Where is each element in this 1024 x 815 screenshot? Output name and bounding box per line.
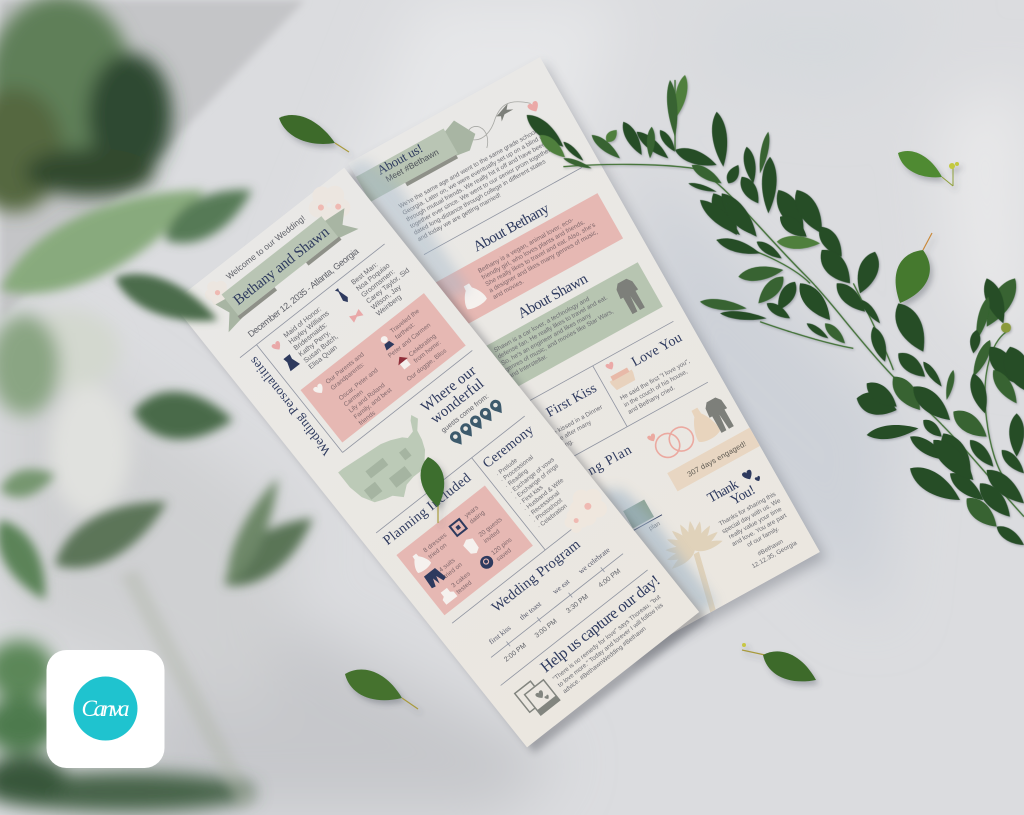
block: Wedding Plan: Wedding Plan	[550, 443, 634, 498]
block: First Kiss	[545, 386, 602, 446]
decoration: flowers behind banner	[195, 176, 357, 315]
block: Wedding Plan: plan	[648, 520, 662, 532]
block: groom's party: Groomsmen:	[360, 269, 396, 299]
block: Help us capture our day: Help us capture our day!	[538, 572, 664, 676]
block: Ceremony: · Husband & Wife	[522, 477, 566, 513]
block: bride's party: Maid of Honor:	[283, 306, 323, 340]
panel: planning stats	[396, 486, 533, 615]
block: Love You: Love You	[629, 330, 685, 370]
block: Love You: He said the first "I love you",	[619, 358, 692, 402]
block: Love You: in the couch of his house,	[623, 368, 689, 409]
banner: About us	[356, 120, 476, 202]
panel: About Bethany: friendly girl, who loves plants and friends.	[481, 219, 587, 281]
block: First Kiss: First Kiss	[544, 381, 599, 421]
chart: program timeline: the toast	[518, 599, 544, 622]
panel: planning stats: dating	[468, 509, 487, 526]
panel: planning stats: saved	[495, 547, 513, 563]
panel: planning stats: years	[463, 504, 480, 519]
icon: white dress	[464, 284, 487, 310]
chart: program timeline: 4:00 PM	[597, 568, 622, 589]
chart: program timeline	[480, 540, 632, 669]
leaf: on page	[417, 455, 449, 523]
block: groom's party	[331, 247, 421, 332]
banner: About us: Meet #Bethawn	[384, 147, 441, 184]
block: First Kiss: dating.	[555, 438, 575, 453]
leaf: top right with bud	[894, 144, 959, 186]
blurred foreground foliage	[0, 0, 325, 812]
icon: suit	[423, 566, 447, 589]
block: Ceremony: · Celebration	[536, 502, 569, 530]
panel: planning stats: tried on	[443, 561, 464, 580]
icon: grey suit	[706, 398, 734, 433]
banner: About us: About us!	[374, 140, 425, 178]
panel: About Shawn: So, he's an engineer and likes many	[500, 312, 593, 367]
heading: Wedding Program: Wedding Program	[489, 536, 584, 616]
block: bride's party: Elisa Quan	[308, 344, 339, 371]
panel: family and guests: Our doggie, Bliss	[406, 347, 448, 383]
block: Thank You	[706, 470, 798, 568]
right page: About us	[345, 54, 826, 664]
text: date and place: December 12, 2035 - Atlanta, Georgia	[246, 246, 361, 339]
chart: program timeline: first kiss	[487, 623, 513, 646]
panel: About Shawn	[486, 262, 663, 386]
heading: About Shawn: About Shawn	[515, 271, 591, 322]
panel: family and guests: Lily and Roland	[348, 382, 387, 415]
banner: names	[207, 202, 361, 332]
block: bride's party: Kathy Perry,	[298, 330, 332, 358]
band: days engaged: 307 days engaged!	[686, 439, 748, 479]
block: Thank You: really value your time	[728, 506, 784, 541]
heading: Wedding Personalities: Wedding Personalities	[246, 354, 334, 459]
leaf: top scattered	[275, 108, 349, 153]
block: groom's party: Carey Taylor, Sid	[365, 267, 411, 305]
icon: traveller	[378, 334, 394, 350]
heading: About Bethany: About Bethany	[471, 201, 553, 255]
text: our story: and today we are getting married!	[416, 192, 502, 243]
block: Ceremony: · Exchange of vows	[508, 456, 556, 496]
panel: planning stats: invited	[483, 528, 502, 545]
badge: Canva logo	[46, 650, 164, 768]
block: groom's party: Noa Poquiao	[355, 262, 391, 293]
panel: About Bethany: and movies.	[492, 278, 525, 301]
block: Ceremony: · Prelude	[495, 457, 519, 478]
panel: About Bethany: Bethany is a vegan, animal lover, eco-	[477, 217, 575, 275]
block: Thank You: Thanks for sharing this	[718, 491, 777, 528]
panel: family and guests: from home:	[413, 339, 443, 365]
block: Thank You: and love. You are part	[731, 512, 788, 548]
panel: About Bethany: She really likes to travel and eat. Also, she's	[484, 222, 597, 288]
block: Ceremony: · Exchange of rings	[513, 463, 560, 501]
heading: Where our wonderful	[418, 363, 495, 435]
blurred leaf overlapping left page corner	[109, 262, 224, 336]
block: Ceremony: Ceremony	[480, 423, 537, 472]
block: First Kiss: date after many	[551, 419, 593, 446]
block: groom's party: Best Man:	[350, 262, 379, 287]
block: Ceremony: · Processional	[499, 454, 535, 484]
block: Love You: and Bethany cried.	[627, 384, 676, 416]
decoration: ceremony flowers	[553, 480, 613, 538]
text: our story: Georgia. Later on, we were eventually set up on a blind date	[401, 129, 553, 217]
block: Thank You: 12.12.35, Georgia	[751, 539, 799, 570]
icon: invitation	[461, 536, 481, 557]
panel: family and guests: Celebrating	[408, 332, 438, 358]
panel: family and guests: Carmen	[343, 389, 365, 408]
panel: About Shawn: genres of music, and movies like Star Wars,	[504, 308, 615, 374]
panel: About Shawn: defense fan. He really likes to travel and eat.	[497, 294, 609, 361]
icon: peach dress	[692, 408, 720, 442]
block: Love You	[606, 334, 690, 414]
block: Thank You: of our family.	[746, 525, 781, 549]
panel: planning stats: 4 suits	[438, 557, 457, 574]
block: bride's party: Hayley Williams	[288, 310, 331, 346]
block: Help us capture our day: "There is no remedy for love" says Thoreau, "but	[552, 594, 662, 683]
block: Thank You: You!	[728, 483, 758, 508]
block: Ceremony: · Photoshoot	[531, 497, 564, 525]
panel: About Bethany	[436, 193, 623, 324]
block: Ceremony: · First kiss	[518, 484, 544, 507]
panel: planning stats: 3 cakes	[450, 570, 472, 589]
block: First Kiss: We kissed in a Dinner	[547, 404, 604, 439]
panel: family and guests: Our Parents and	[325, 351, 366, 386]
chart: program timeline: 3:30 PM	[565, 593, 590, 615]
branch: green foliage	[522, 74, 1024, 550]
icon: grey suit	[616, 278, 645, 314]
panel: planning stats: 20 guests	[478, 516, 504, 539]
block: Thank You: special day with us. We	[721, 497, 782, 535]
text: our story: together ever since. We went to our senior prom together,	[409, 146, 553, 230]
icon: calendar	[450, 519, 467, 536]
text: our story: We're the same age and went to the same grade school in	[398, 125, 544, 210]
block: Help us capture our day: advice. #BethawnWedding #Bethawn	[562, 625, 648, 695]
leaf: right large	[885, 233, 938, 309]
icon: white heart	[312, 383, 326, 396]
panel: About Shawn: and Interstellar.	[508, 353, 549, 380]
icon: wedding rings	[654, 426, 694, 458]
panel: family and guests: Peter and Carmen	[387, 322, 433, 360]
block: Ceremony: · Reading	[504, 467, 530, 490]
icon: cake	[438, 586, 457, 605]
panel: family and guests: Traveled the	[389, 307, 421, 335]
block: Thank You: Thank	[705, 477, 741, 506]
map: United States	[338, 413, 451, 519]
panel: planning stats: 120 pins	[490, 536, 513, 557]
icon: house	[395, 353, 412, 371]
icon: pinterest	[478, 553, 496, 571]
panel: planning stats: 8 dresses	[422, 532, 448, 554]
block: Help us capture our day: to love more." Today and forever I will follow his	[557, 602, 665, 689]
panel: planning stats: tested	[455, 579, 474, 596]
panel: family and guests: Oscar, Peter and	[338, 367, 380, 402]
panel: family and guests: Grandparents:	[330, 361, 366, 392]
text: our story: through mutual friends. We really hit it off and have been	[405, 141, 547, 223]
chart: program timeline: 3:00 PM	[534, 618, 559, 640]
block: bride's party: Bridesmaids:	[293, 322, 329, 352]
heading: Where our wonderful: guests come from:	[440, 393, 490, 434]
leaf: bottom scattered	[340, 662, 418, 710]
band: days engaged	[667, 425, 765, 491]
block: Thank You: #Bethawn	[757, 538, 785, 558]
heading: Planning Included: Planning Included	[381, 471, 474, 549]
left page: Welcome	[171, 167, 707, 753]
icon: palm tree	[666, 521, 722, 612]
panel: family and guests: Family, and best	[353, 387, 394, 421]
block: Ceremony	[480, 423, 585, 532]
block: bride's party	[269, 303, 351, 381]
text: our story: dated long-distance through college in different states	[413, 158, 547, 237]
block: Wedding Plan	[584, 398, 760, 532]
block: Ceremony: · Recessional	[527, 490, 561, 519]
block: bride's party: Susan Butch,	[303, 334, 340, 365]
heading: Where our wonderful: wonderful	[428, 376, 487, 427]
chart: program timeline: we celebrate	[576, 545, 612, 576]
icons: location pins	[448, 398, 506, 448]
panel: family and guests	[301, 293, 466, 442]
panel: family and guests: friends	[358, 410, 377, 427]
icon: polaroid photos	[515, 674, 560, 719]
banner: names: Bethany and Shawn	[231, 224, 333, 309]
chart: program timeline: 2:00 PM	[503, 642, 528, 664]
panel: family and guests: farthest:	[394, 321, 417, 341]
panel: About Bethany: a designer and likes many genres of music,	[488, 229, 599, 294]
icon: dress	[408, 550, 432, 574]
panel: About Shawn: Shawn is a car lover, a technology and	[493, 296, 591, 354]
leaf: bottom right with bud	[742, 643, 821, 691]
panel: planning stats: tried on	[427, 542, 449, 561]
heading: Where our wonderful: Where our	[418, 363, 479, 416]
chart: program timeline: we eat	[551, 576, 572, 596]
block: groom's party: Wilson, Jay	[370, 284, 403, 312]
text: welcome: Welcome to our Wedding!	[224, 213, 307, 281]
badge: Canva logo: Canva	[82, 696, 130, 721]
icon: plane with looping trail and heart	[468, 101, 538, 148]
block: groom's party: Weinberg	[375, 294, 403, 318]
